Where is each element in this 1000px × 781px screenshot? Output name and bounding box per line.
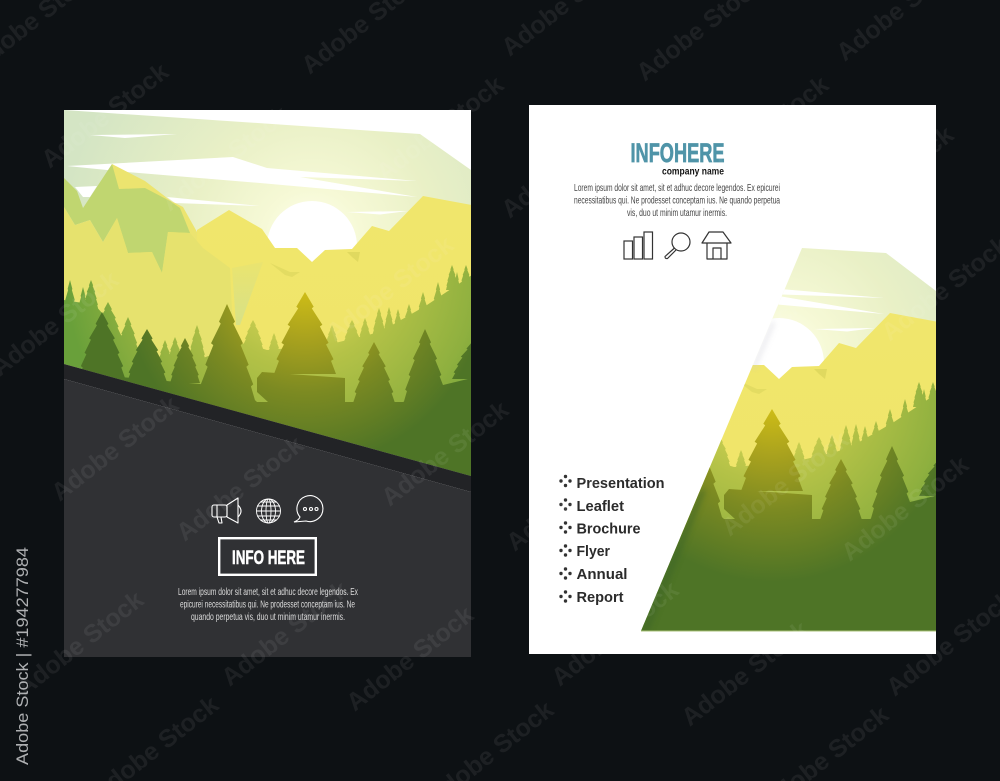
watermarks: Adobe Stock: [716, 426, 854, 542]
watermarks: Adobe Stock: [546, 576, 684, 692]
watermarks: Adobe Stock: [321, 231, 459, 347]
icon: megaphone: [212, 498, 241, 523]
text block: cover description: Lorem ipsum dolor sit amet, sit et adhuc decore legendos. Ex: [178, 586, 358, 598]
watermarks: Adobe Stock: [341, 601, 479, 717]
stock id vertical text: Adobe Stock | #194277984: [13, 547, 32, 765]
watermarks: Adobe Stock: [46, 391, 184, 507]
watermarks: Adobe Stock: [821, 121, 959, 237]
watermarks: Adobe Stock: [836, 451, 974, 567]
page base: [529, 105, 936, 654]
text block: cover description: epicurei necessitatibus qui. Ne prodesset conceptam ius. Ne: [180, 598, 355, 610]
text block: intro: necessitatibus qui. Ne prodesset conceptam ius. Ne quando perpetua: [574, 194, 780, 206]
text block: intro: [574, 182, 780, 219]
watermarks: Adobe Stock: [696, 71, 834, 187]
watermarks: Adobe Stock: [36, 58, 174, 174]
panel: right brochure page: [529, 105, 939, 654]
list item: leaflet: Leaflet: [576, 498, 624, 515]
sky: [64, 110, 471, 300]
watermarks: Adobe Stock: [671, 291, 809, 407]
company name: company name: [662, 166, 724, 178]
sun: [267, 201, 357, 291]
clouds: [67, 134, 417, 214]
watermarks: Adobe Stock: [541, 246, 679, 362]
dark lower panel: [64, 379, 471, 657]
icon: magnifier: [665, 233, 690, 259]
dark diagonal band: [64, 364, 471, 492]
text block: intro: vis, duo ut minim utamur inermis.: [627, 207, 727, 219]
baseline strip: [641, 630, 936, 632]
icon: globe: [256, 499, 280, 523]
cover base: [64, 110, 471, 657]
text block: intro: Lorem ipsum dolor sit amet, sit et adhuc decore legendos. Ex epicurei: [574, 182, 780, 194]
watermarks: Adobe Stock: [376, 396, 514, 512]
list item: report: Report: [576, 589, 624, 606]
watermarks: Adobe Stock: [496, 108, 634, 224]
panel: left brochure cover: [64, 110, 472, 657]
front pine trees: [64, 285, 472, 530]
watermarks: Adobe Stock: [11, 586, 149, 702]
list item: flyer: Flyer: [576, 543, 610, 560]
text block: cover description: [178, 586, 358, 623]
icon: house: [702, 232, 731, 259]
button: info here: [219, 538, 316, 575]
illustration: forest landscape: [64, 110, 471, 476]
list: document types: [559, 475, 664, 606]
icon: speech bubble: [294, 496, 323, 522]
text block: cover description: quando perpetua vis, duo ut minim utamur inermis.: [191, 611, 345, 623]
watermarks: Adobe Stock: [501, 441, 639, 557]
title: INFOHERE: [630, 138, 724, 168]
watermarks: Adobe Stock: [371, 71, 509, 187]
mountains: [64, 164, 472, 420]
back tree line: [64, 260, 472, 530]
icon: bar chart: [624, 232, 652, 259]
watermarks: Adobe Stock: [171, 431, 309, 547]
list item: annual: Annual: [576, 566, 628, 583]
list item: brochure: Brochure: [576, 520, 640, 538]
watermarks: Adobe Stock: [156, 101, 294, 217]
list item: presentation: Presentation: [576, 475, 664, 492]
watermarks: Adobe Stock: [676, 616, 814, 732]
illustration: forest landscape cut diagonally: [641, 248, 936, 630]
button: info here: INFO HERE: [232, 548, 305, 569]
watermarks: Adobe Stock: [216, 576, 354, 692]
